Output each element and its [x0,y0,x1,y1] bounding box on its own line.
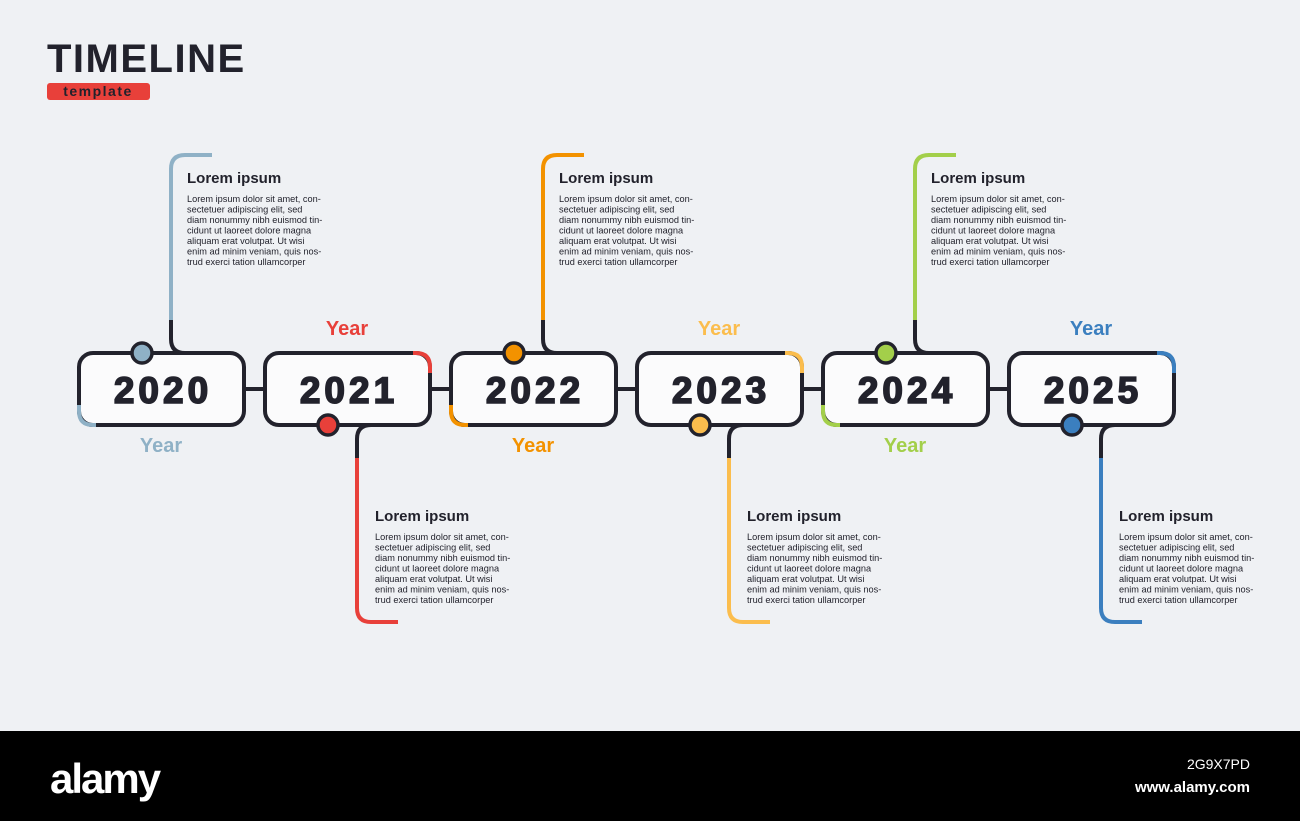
milestone 2021: Lorem ipsum dolor sit amet, con- [375,532,509,542]
milestone 2020: Lorem ipsum [187,170,281,187]
milestone 2021: cidunt ut laoreet dolore magna [375,564,500,574]
milestone 2020: enim ad minim veniam, quis nos- [187,246,321,256]
milestone 2021: trud exerci tation ullamcorper [375,595,493,605]
milestone 2020 [79,155,322,457]
milestone 2022: 2022 [486,370,584,411]
milestone 2020: aliquam erat volutpat. Ut wisi [187,236,304,246]
milestone 2025: enim ad minim veniam, quis nos- [1119,584,1253,594]
title [47,37,246,100]
footer band: www.alamy.com [1134,779,1250,796]
milestone 2023: sectetuer adipiscing elit, sed [747,542,862,552]
milestone 2024: Lorem ipsum dolor sit amet, con- [931,194,1065,204]
title: TIMELINE [47,37,246,81]
milestone 2021 [265,318,510,622]
milestone 2025: aliquam erat volutpat. Ut wisi [1119,574,1236,584]
milestone 2022: enim ad minim veniam, quis nos- [559,246,693,256]
milestone 2021: diam nonummy nibh euismod tin- [375,553,510,563]
milestone 2020: sectetuer adipiscing elit, sed [187,204,302,214]
milestone 2024: trud exerci tation ullamcorper [931,257,1049,267]
milestone 2025: cidunt ut laoreet dolore magna [1119,564,1244,574]
milestone 2025 [1009,318,1254,622]
milestone 2025: trud exerci tation ullamcorper [1119,595,1237,605]
milestone 2025: sectetuer adipiscing elit, sed [1119,542,1234,552]
milestone 2022: Lorem ipsum [559,170,653,187]
milestone 2020: trud exerci tation ullamcorper [187,257,305,267]
connector lines between boxes [244,387,1009,391]
milestone 2020: diam nonummy nibh euismod tin- [187,215,322,225]
milestone 2021: 2021 [300,370,398,411]
milestone 2024: enim ad minim veniam, quis nos- [931,246,1065,256]
milestone 2023: trud exerci tation ullamcorper [747,595,865,605]
milestone 2021: Lorem ipsum [375,508,469,525]
milestone 2024: sectetuer adipiscing elit, sed [931,204,1046,214]
milestone 2024 [823,155,1066,457]
milestone 2020: Lorem ipsum dolor sit amet, con- [187,194,321,204]
milestone 2023: 2023 [672,370,770,411]
milestone 2023 [637,318,882,622]
milestone 2025: Lorem ipsum dolor sit amet, con- [1119,532,1253,542]
milestone 2022 [451,155,694,457]
milestone 2020: Year [140,435,182,457]
milestone 2023: aliquam erat volutpat. Ut wisi [747,574,864,584]
title: template [63,83,133,99]
milestone 2020: cidunt ut laoreet dolore magna [187,226,312,236]
milestone 2021: enim ad minim veniam, quis nos- [375,584,509,594]
footer band: 2G9X7PD [1187,756,1250,772]
milestone 2023: diam nonummy nibh euismod tin- [747,553,882,563]
milestone 2024: Year [884,435,926,457]
milestone 2024: cidunt ut laoreet dolore magna [931,226,1056,236]
milestone 2024: aliquam erat volutpat. Ut wisi [931,236,1048,246]
milestone 2022: trud exerci tation ullamcorper [559,257,677,267]
milestone 2020: 2020 [114,370,212,411]
milestone 2021: sectetuer adipiscing elit, sed [375,542,490,552]
milestone 2025: diam nonummy nibh euismod tin- [1119,553,1254,563]
milestone 2023: Lorem ipsum dolor sit amet, con- [747,532,881,542]
milestone 2022: cidunt ut laoreet dolore magna [559,226,684,236]
milestone 2025: Year [1070,318,1112,340]
footer band: alamy [50,755,162,802]
milestone 2023: cidunt ut laoreet dolore magna [747,564,872,574]
milestone 2024: diam nonummy nibh euismod tin- [931,215,1066,225]
milestone 2023: Year [698,318,740,340]
milestone 2023: Lorem ipsum [747,508,841,525]
milestone 2022: diam nonummy nibh euismod tin- [559,215,694,225]
milestone 2024: Lorem ipsum [931,170,1025,187]
milestone 2021: Year [326,318,368,340]
milestone 2024: 2024 [858,370,956,411]
milestone 2023: enim ad minim veniam, quis nos- [747,584,881,594]
milestone 2022: Lorem ipsum dolor sit amet, con- [559,194,693,204]
milestone 2022: Year [512,435,554,457]
milestone 2021: aliquam erat volutpat. Ut wisi [375,574,492,584]
footer band [0,731,1300,821]
milestone 2025: Lorem ipsum [1119,508,1213,525]
milestone 2022: sectetuer adipiscing elit, sed [559,204,674,214]
milestone 2025: 2025 [1044,370,1142,411]
milestone 2022: aliquam erat volutpat. Ut wisi [559,236,676,246]
